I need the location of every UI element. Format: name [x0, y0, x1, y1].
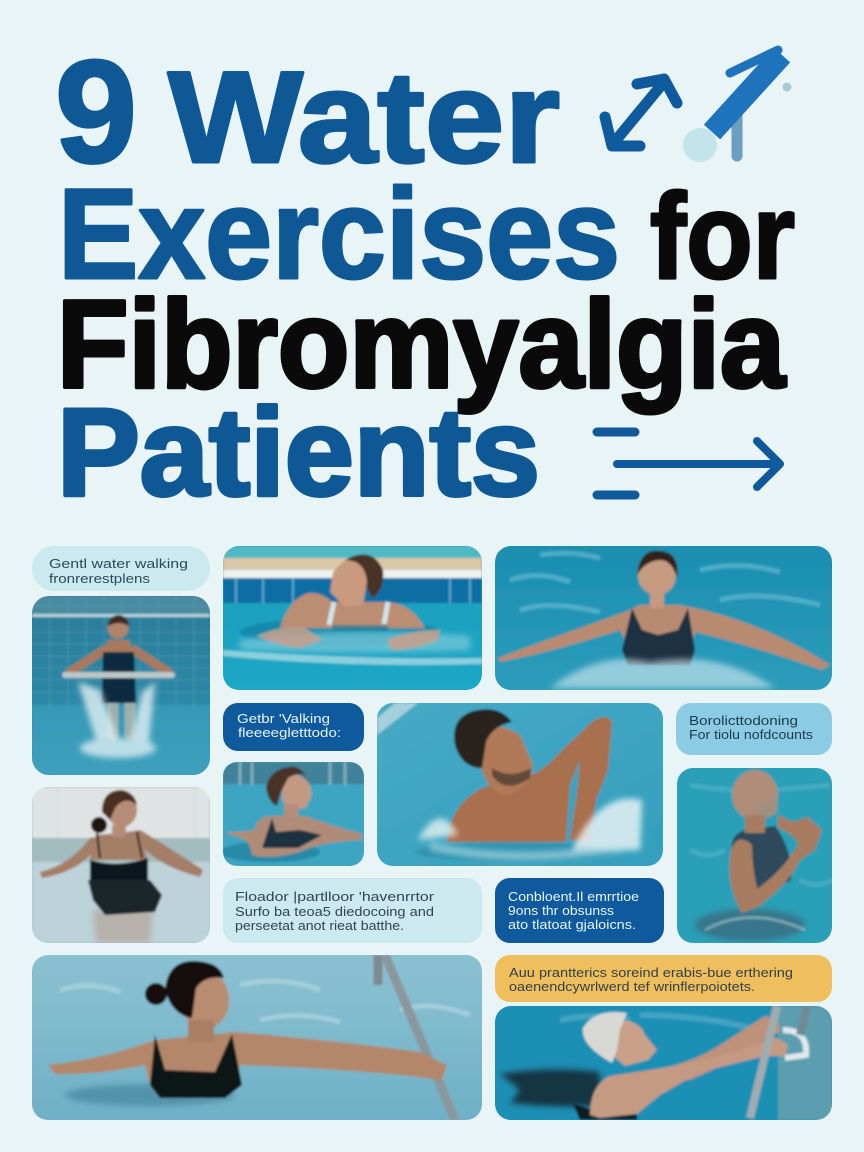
icon: speed arrow — [597, 432, 780, 495]
photo: older man in pool — [673, 764, 836, 947]
photo: woman at pool edge — [219, 542, 486, 694]
photo: woman with pool noodle — [28, 592, 214, 779]
label: gentle water walking: fronrerestplens — [49, 571, 151, 586]
label: yellow caution note: oaenendcywrlwerd tef wrinflerpoiotets. — [509, 979, 755, 994]
label: conditioning for all: Borolicttodoning — [689, 713, 798, 728]
label: confidence dark: 9ons thr obsunss — [508, 903, 615, 918]
title: Exercises — [58, 163, 620, 306]
title: 9 — [55, 30, 137, 193]
label: confidence dark — [495, 878, 664, 943]
photo: woman swimming front view — [491, 542, 836, 694]
label: floor balance: perseetat anot rieat batthe. — [235, 918, 404, 933]
label: floor balance: Floador |partlloor 'havenrrtor — [235, 889, 435, 904]
title: for — [650, 168, 795, 304]
label: gentle water walking — [32, 546, 210, 591]
label: floor balance: Surfo ba teoa5 diedocoing and — [235, 904, 434, 919]
photo: man in pool — [373, 699, 667, 870]
label: water walking dark: Getbr 'Valking — [237, 711, 330, 726]
title — [55, 30, 795, 522]
label: conditioning for all: For tiolu nofdcounts — [689, 727, 814, 742]
title: Water — [168, 44, 560, 190]
label: floor balance — [223, 878, 482, 943]
title: Fibromyalgia — [57, 276, 786, 414]
icon: pool noodle and stick — [683, 50, 792, 162]
photo: older woman holding rail — [491, 1002, 836, 1124]
label: confidence dark: Conbloent.Il emrrtioe — [508, 889, 639, 904]
icon: double-headed arrow — [605, 79, 677, 146]
label: gentle water walking: Gentl water walking — [49, 556, 188, 571]
photo: woman looking sideways — [223, 762, 364, 866]
label: water walking dark — [223, 703, 364, 751]
photo: woman in black swimsuit — [28, 783, 214, 947]
label: confidence dark: ato tlatoat gjaloicns. — [508, 917, 636, 932]
label: yellow caution note: Auu prantterics soreind erabis-bue erthering — [509, 965, 793, 980]
label: water walking dark: fleeeegletttodo: — [238, 725, 341, 740]
title: Patients — [57, 384, 540, 522]
label: conditioning for all — [676, 703, 832, 755]
label: yellow caution note — [495, 955, 832, 1002]
photo: woman at pool rail — [28, 951, 486, 1124]
